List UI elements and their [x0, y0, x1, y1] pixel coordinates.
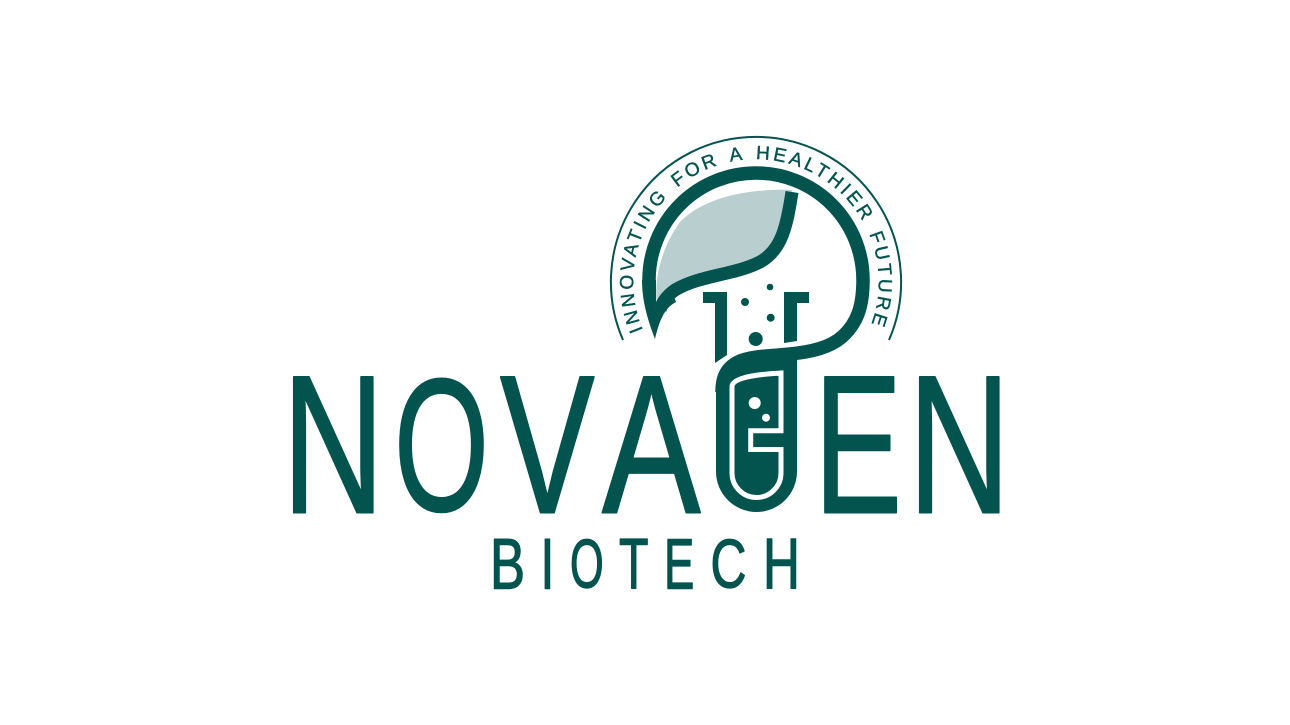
subtitle: T: [619, 524, 648, 604]
wordmark: N: [282, 336, 384, 555]
test tube G: [716, 352, 797, 512]
subtitle: H: [763, 525, 800, 605]
subtitle: E: [664, 524, 694, 604]
crescent tip: [642, 280, 676, 339]
wordmark: N: [908, 336, 1010, 555]
bubbles: [741, 284, 775, 346]
wordmark: V: [500, 336, 595, 555]
leaf: [656, 190, 792, 306]
wordmark: [282, 334, 1010, 555]
tube body: [716, 352, 797, 512]
tube inner line: [732, 373, 781, 498]
wordmark: O: [394, 339, 489, 551]
subtitle: [490, 524, 800, 605]
leaf stem curve: [660, 192, 792, 310]
flask neck left: [703, 292, 727, 363]
wordmark: A: [602, 334, 701, 554]
tagline: INNOVATING FOR A HEALTHIER FUTURE: [620, 146, 892, 334]
outer arc line: [611, 137, 901, 340]
flask neck right: [784, 292, 809, 343]
subtitle: I: [540, 525, 554, 604]
emblem: [610, 136, 902, 512]
ring and band: [649, 173, 863, 392]
wordmark: E: [814, 334, 902, 555]
subtitle: C: [710, 526, 746, 602]
subtitle: O: [570, 526, 604, 603]
tube bubbles: [749, 397, 761, 409]
subtitle: B: [490, 525, 525, 604]
